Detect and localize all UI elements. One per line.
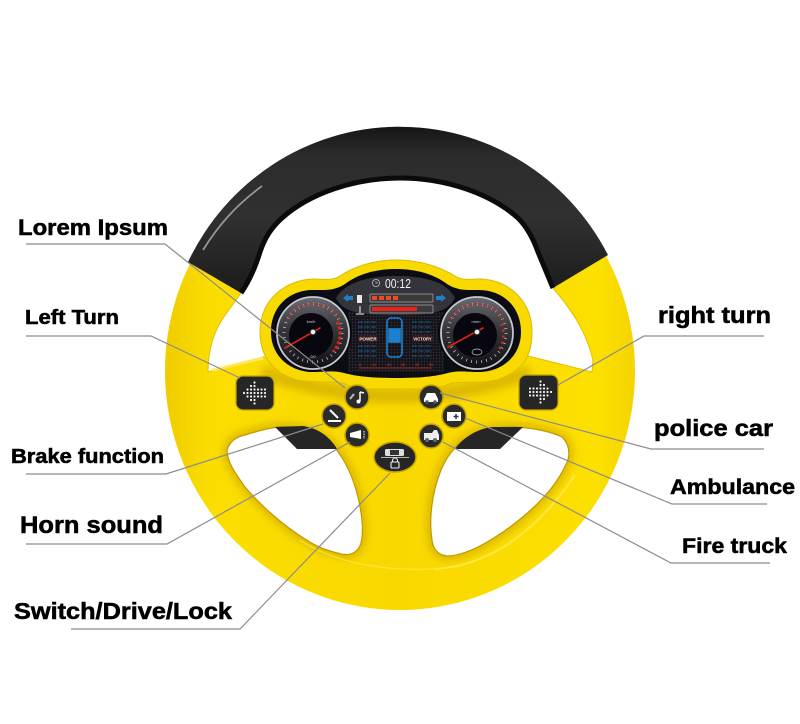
label: police car: police car — [654, 415, 773, 441]
car outline — [387, 318, 402, 357]
blue wave lines right — [412, 322, 432, 356]
display panel — [336, 276, 455, 315]
lower left opening — [227, 427, 362, 555]
fire truck button — [419, 424, 443, 448]
dashboard screen — [271, 269, 521, 378]
grip inner lip — [241, 178, 553, 293]
victory label — [412, 335, 433, 342]
rim highlight left — [300, 540, 435, 569]
grip gloss — [203, 186, 262, 250]
display grid — [348, 312, 444, 372]
label: Brake function: Brake function — [11, 446, 164, 468]
speed scale — [359, 362, 434, 368]
label: Ambulance: Ambulance — [670, 476, 795, 499]
power label: POWER — [359, 336, 377, 342]
ambulance button — [442, 404, 466, 428]
label: Left Turn — [25, 307, 240, 378]
spoke highlight — [212, 358, 263, 370]
label: Switch/Drive/Lock — [14, 473, 390, 629]
police car button — [419, 385, 443, 409]
left turn pad — [236, 376, 274, 410]
label: right turn — [558, 302, 771, 385]
victory label: VICTORY — [413, 336, 432, 342]
rim highlight — [435, 475, 575, 569]
power label — [358, 335, 378, 342]
temperature bar — [370, 305, 433, 313]
speed scale: 10 — [372, 362, 377, 367]
fuel bar — [370, 294, 433, 302]
turn arrows — [343, 294, 446, 302]
upper opening — [208, 180, 593, 372]
blue wave lines left — [358, 322, 376, 356]
left gauge: km/h — [307, 319, 315, 324]
label: Left Turn: Left Turn — [25, 307, 119, 329]
horn button — [345, 423, 369, 447]
left gauge: 0/0 — [310, 354, 317, 359]
speed scale: 20 — [387, 362, 392, 367]
brake button — [322, 404, 346, 428]
label: Ambulance — [465, 418, 795, 504]
right black insert — [455, 427, 523, 449]
speed scale: 50 — [429, 362, 434, 367]
speed scale: 40 — [415, 362, 420, 367]
timer readout: 00:12 — [385, 276, 411, 291]
wheel rim and spokes — [165, 132, 635, 610]
fuel icon — [357, 295, 362, 303]
label: Fire truck: Fire truck — [682, 535, 787, 558]
right gauge — [438, 294, 516, 372]
left black insert — [275, 426, 337, 449]
speed scale: 30 — [401, 362, 406, 367]
speed scale: 8 — [359, 362, 362, 367]
label: Brake function — [11, 424, 323, 474]
label: police car — [440, 393, 773, 449]
right turn pad — [519, 375, 558, 410]
label: Switch/Drive/Lock: Switch/Drive/Lock — [14, 598, 232, 624]
right gauge: r/min — [472, 319, 480, 324]
label: Lorem Ipsum — [18, 215, 345, 388]
label: right turn: right turn — [658, 302, 771, 328]
lower right opening — [431, 427, 569, 556]
label: Horn sound — [20, 442, 350, 544]
dashboard housing — [260, 260, 532, 389]
label: Lorem Ipsum: Lorem Ipsum — [18, 215, 168, 240]
lower opening shading — [227, 372, 569, 556]
left gauge — [274, 294, 352, 372]
black grip — [188, 127, 608, 293]
label: Horn sound: Horn sound — [20, 512, 163, 539]
temperature icon — [356, 306, 364, 314]
music button — [345, 385, 369, 409]
label: Fire truck — [443, 442, 787, 563]
steering wheel — [165, 127, 635, 610]
clock icon — [372, 279, 380, 287]
switch and lock button — [374, 442, 416, 472]
